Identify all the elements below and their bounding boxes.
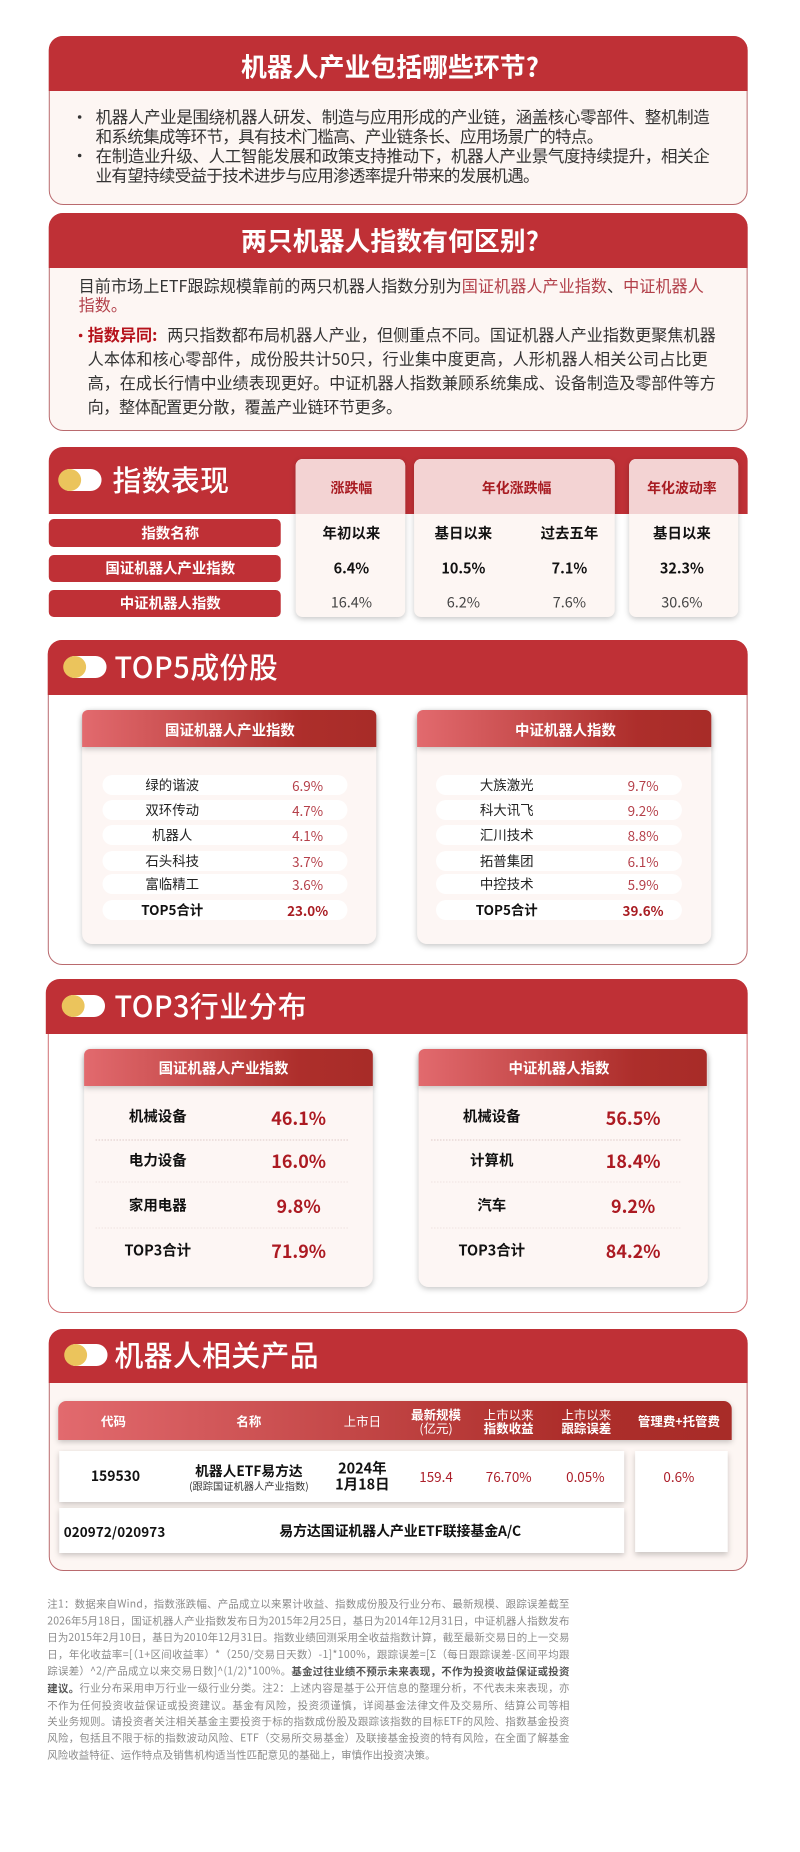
panel: TOP3行业分布: [46, 979, 748, 1312]
column: 年化涨跌幅: 10.5%: [441, 557, 486, 579]
text block: 产业说明: 机器人产业是围绕机器人研发、制造与应用形成的产业链，涵盖核心零部件、整机制造: [96, 104, 710, 128]
column: 涨跌幅: 6.4%: [334, 557, 369, 579]
icon: toggle: [62, 995, 105, 1017]
list: 成份股: [103, 774, 347, 920]
table row: 020972/020973: 易方达国证机器人产业ETF联接基金A/C: [279, 1521, 521, 1541]
heading: TOP3行业分布: TOP3行业分布: [114, 984, 307, 1026]
table: 行业权重: [96, 1105, 349, 1264]
panel: 指数表现: [49, 447, 748, 617]
list: 成份股: 拓普集团: [480, 850, 534, 870]
column: 年化涨跌幅: 7.6%: [553, 591, 586, 613]
table row: 159530: 2024年: [338, 1457, 387, 1479]
list: 成份股: 4.7%: [292, 800, 323, 820]
row label: 指数名称: [49, 519, 281, 547]
list: 成份股: 双环传动: [145, 799, 199, 819]
column: 年化涨跌幅: 7.1%: [552, 557, 587, 579]
table cell: 管理费+托管费: 0.6%: [663, 1466, 694, 1486]
column: 年化波动率: 年化波动率: [647, 478, 717, 498]
card: 中证机器人指数: 中证机器人指数: [508, 1057, 610, 1079]
column: 年化波动率: 32.3%: [660, 557, 704, 579]
footnote: 关业务规则。请投资者关注相关基金主要投资于标的指数成份股及跟踪该指数的目标ETF的风险、指数基金投资: [47, 1714, 569, 1729]
table: 行业权重: 机械设备: [463, 1105, 521, 1127]
list: 成份股: 8.8%: [628, 825, 659, 845]
list: 成份股: 3.6%: [292, 874, 323, 894]
table header: [58, 1401, 732, 1440]
table: 行业权重: 71.9%: [271, 1238, 326, 1264]
footnote: 不作为任何投资收益保证或投资建议。基金有风险，投资须谨慎，详阅基金法律文件及交易所、结算公司等相: [47, 1698, 569, 1713]
heading: 指数表现: 指数表现: [112, 458, 229, 500]
heading: TOP5成份股: TOP5成份股: [114, 645, 278, 687]
heading: 机器人相关产品: 机器人相关产品: [114, 1333, 319, 1375]
text block: 产业说明: [78, 104, 710, 187]
column: 年化涨跌幅: 6.2%: [447, 591, 480, 613]
column: 涨跌幅: 涨跌幅: [331, 478, 372, 498]
table row: 020972/020973: 020972/020973: [64, 1521, 165, 1541]
text block: 指数异同: 两只指数都布局机器人产业，但侧重点不同。国证机器人产业指数更聚焦机器: [167, 322, 716, 346]
table header: 管理费+托管费: [638, 1412, 720, 1430]
table: 行业权重: 计算机: [470, 1149, 514, 1171]
table header: 上市以来: [484, 1405, 534, 1424]
footnote: 踪误差）^2/产品成立以来交易日数]^(1/2)*100%。基金过往业绩不预示未来表现，不作为投资收益保证或投资: [47, 1663, 570, 1679]
list: 成份股: TOP5合计: [476, 899, 538, 919]
heading: 机器人产业包括哪些环节: 机器人产业包括哪些环节?: [241, 47, 539, 85]
table header: 代码: [101, 1412, 126, 1430]
footnote: 注1：数据来自Wind，指数涨跌幅、产品成立以来累计收益、指数成份股及行业分布、最新规模、跟踪误差截至: [47, 1596, 569, 1612]
list: 成份股: 汇川技术: [480, 824, 534, 844]
list: 成份股: 绿的谐波: [145, 774, 199, 794]
list: 成份股: 9.2%: [628, 800, 659, 820]
text block: 指数简介: 指数。: [79, 292, 127, 316]
column: 涨跌幅: 年初以来: [323, 522, 381, 544]
table: 行业权重: 机械设备: [129, 1105, 187, 1127]
column: 年化波动率: 30.6%: [661, 591, 703, 613]
table header: (亿元): [419, 1419, 453, 1437]
table header: 上市日: [344, 1412, 381, 1430]
text block: 指数异同: 高，在成长行情中业绩表现更好。中证机器人指数兼顾系统集成、设备制造及零部件等方: [88, 370, 716, 394]
table: 行业权重: 18.4%: [606, 1148, 661, 1174]
table: 行业权重: 56.5%: [606, 1105, 661, 1131]
table row: 159530: 1月18日: [335, 1473, 390, 1495]
icon: toggle: [63, 656, 107, 678]
table header: 最新规模: [411, 1405, 461, 1424]
table row: 159530: 159.4: [419, 1466, 453, 1486]
text block: 指数简介: 目前市场上ETF跟踪规模靠前的两只机器人指数分别为国证机器人产业指数、中证机器人: [79, 273, 704, 297]
table row: 159530: 0.05%: [566, 1466, 605, 1486]
list: 成份股: 石头科技: [145, 850, 199, 870]
text block: 指数简介: [79, 273, 704, 316]
text block: 指数异同: 向，整体配置更分散，覆盖产业链环节更多。: [88, 394, 402, 418]
table: 行业权重: 84.2%: [606, 1238, 661, 1264]
table header: 跟踪误差: [561, 1419, 611, 1437]
card: 中证机器人指数: 中证机器人指数: [515, 719, 616, 741]
table: 行业权重: 9.2%: [611, 1193, 655, 1219]
column: 年化波动率: 基日以来: [653, 522, 711, 544]
footnote: 风险收益特征、运作特点及销售机构适当性匹配意见的基础上，审慎作出投资决策。: [47, 1747, 436, 1763]
list: 成份股: 9.7%: [628, 775, 659, 795]
heading: 两只机器人指数有何区别: 两只机器人指数有何区别?: [241, 221, 539, 259]
card: 中证机器人指数: [417, 710, 711, 944]
column: 涨跌幅: [296, 459, 405, 617]
table row: 159530: 159530: [91, 1466, 140, 1486]
table: 行业权重: [431, 1105, 682, 1264]
panel: 机器人相关产品: [49, 1329, 748, 1570]
column: 年化波动率: [629, 459, 738, 617]
row label: 中证机器人指数: 中证机器人指数: [120, 592, 221, 614]
table header: 指数收益: [484, 1419, 534, 1437]
panel: 两只机器人指数有何区别: [49, 213, 748, 430]
card: 中证机器人指数: [419, 1049, 708, 1287]
table cell: 管理费+托管费: [635, 1451, 728, 1552]
table: 行业权重: 汽车: [477, 1194, 506, 1216]
icon: toggle: [64, 1344, 108, 1366]
list: 成份股: 39.6%: [623, 900, 664, 920]
list: 成份股: 6.1%: [628, 851, 659, 871]
table: 行业权重: 9.8%: [277, 1193, 321, 1219]
column: 年化涨跌幅: 基日以来: [435, 522, 493, 544]
list: 成份股: [436, 774, 682, 920]
table header: 上市以来: [561, 1405, 612, 1424]
list: 成份股: TOP5合计: [141, 899, 203, 919]
text block: 产业说明: 业有望持续受益于技术进步与应用渗透率提升带来的发展机遇。: [96, 162, 540, 187]
table: 行业权重: TOP3合计: [458, 1239, 525, 1261]
footnote: [47, 1596, 570, 1763]
row label: 国证机器人产业指数: 国证机器人产业指数: [105, 557, 236, 579]
text block: 产业说明: 和系统集成等环节，具有技术门槛高、产业链条长、应用场景广的特点。: [96, 123, 603, 148]
card: 国证机器人产业指数: [82, 710, 376, 944]
list: 成份股: 科大讯飞: [480, 799, 534, 819]
table: 行业权重: TOP3合计: [124, 1239, 191, 1261]
list: 成份股: 大族激光: [480, 774, 534, 794]
table row: 159530: (跟踪国证机器人产业指数): [189, 1478, 309, 1493]
footnote: 建议。行业分布采用申万行业一级行业分类。注2：上述内容是基于公开信息的整理分析，不代表未来表现，亦: [47, 1680, 569, 1696]
table row: 020972/020973: [59, 1508, 624, 1553]
list: 成份股: 中控技术: [480, 873, 534, 893]
row label: 指数名称: 指数名称: [141, 522, 200, 544]
list: 成份股: 机器人: [152, 824, 192, 844]
footnote: 日为2015年2月10日，基日为2010年12月31日。指数业绩回测采用全收益指数计算，截至最新交易日的上一交易: [47, 1630, 569, 1645]
table header: 名称: [236, 1412, 262, 1430]
text block: 指数异同: 指数异同:: [88, 322, 157, 346]
icon: toggle: [58, 469, 102, 491]
row label: 国证机器人产业指数: [49, 555, 281, 582]
table: 行业权重: 16.0%: [271, 1148, 326, 1174]
text block: 指数异同: 人本体和核心零部件，成份股共计50只，行业集中度更高，人形机器人相关公司占比更: [88, 346, 708, 370]
list: 成份股: 富临精工: [145, 873, 199, 893]
list: 成份股: 4.1%: [292, 825, 323, 845]
table: 行业权重: 46.1%: [271, 1105, 326, 1131]
list: 成份股: 23.0%: [287, 900, 328, 920]
table: 行业权重: 电力设备: [129, 1149, 187, 1171]
panel: TOP5成份股: [48, 640, 748, 964]
list: 成份股: 6.9%: [292, 775, 323, 795]
card: 国证机器人产业指数: 国证机器人产业指数: [165, 719, 295, 741]
column: 年化涨跌幅: [414, 459, 615, 617]
table row: 159530: 机器人ETF易方达: [195, 1460, 303, 1480]
footnote: 2026年5月18日，国证机器人产业指数发布日为2015年2月25日，基日为2014年12月31日，中证机器人指数发布: [47, 1613, 569, 1629]
text block: 产业说明: 在制造业升级、人工智能发展和政策支持推动下，机器人产业景气度持续提升，相关企: [96, 143, 710, 167]
column: 年化涨跌幅: 年化涨跌幅: [482, 478, 552, 498]
list: 成份股: 5.9%: [628, 874, 659, 894]
table: 行业权重: 家用电器: [129, 1194, 187, 1216]
panel: 机器人产业包括哪些环节: [49, 36, 748, 204]
card: 国证机器人产业指数: 国证机器人产业指数: [159, 1057, 289, 1079]
footnote: 风险，包括且不限于标的指数波动风险、ETF（交易所交易基金）及联接基金投资的特有风险，在全面了解基金: [47, 1730, 570, 1746]
column: 涨跌幅: 16.4%: [331, 591, 372, 613]
table row: 159530: 76.70%: [486, 1466, 532, 1486]
list: 成份股: 3.7%: [292, 851, 323, 871]
table row: 159530: [59, 1451, 624, 1502]
row label: 中证机器人指数: [49, 590, 281, 617]
footnote: 日，年化收益率=[（1+区间收益率）*（250/交易日天数）-1]*100%，跟踪误差=[Σ（每日跟踪误差-区间平均跟: [47, 1647, 570, 1662]
column: 年化涨跌幅: 过去五年: [541, 522, 598, 544]
card: 国证机器人产业指数: [84, 1049, 373, 1287]
text block: 指数异同: [79, 322, 716, 418]
